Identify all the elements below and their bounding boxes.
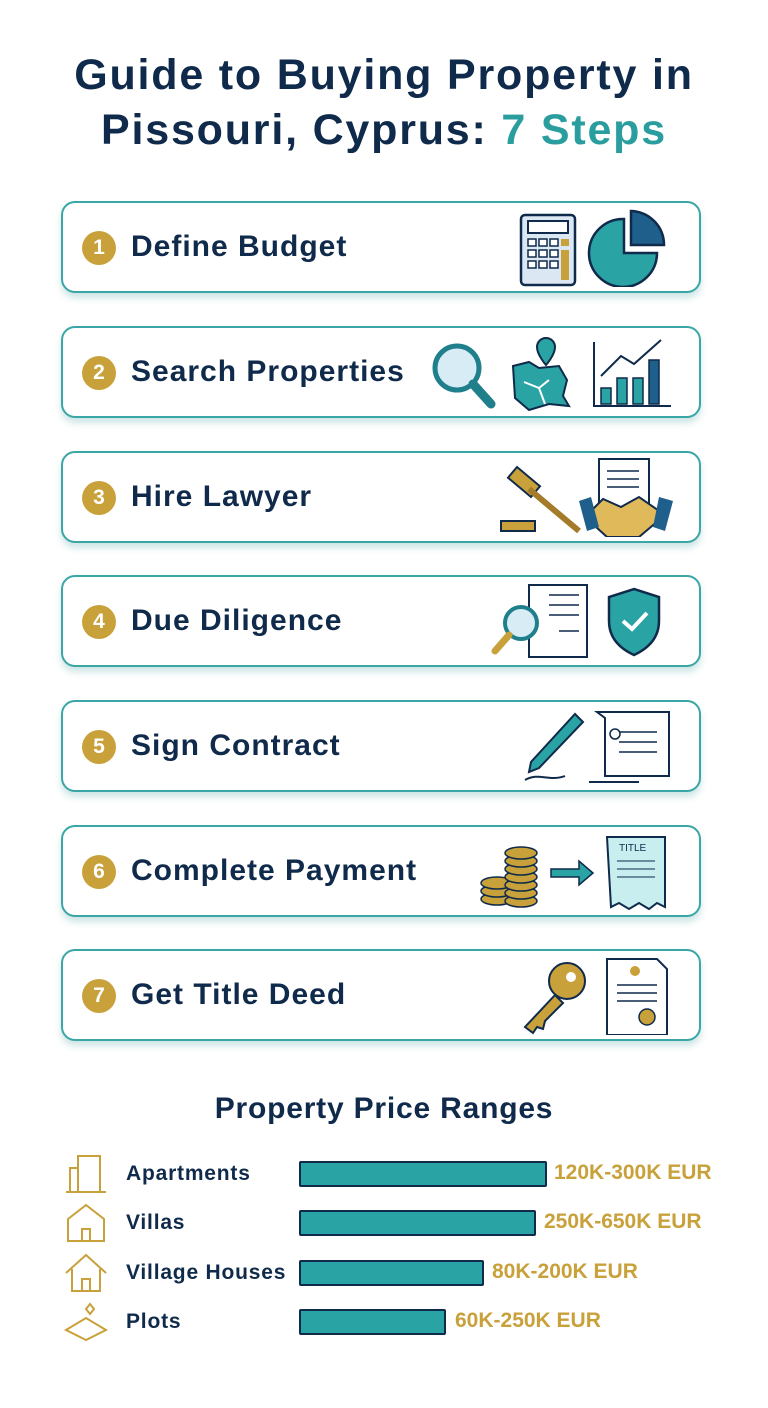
panel: step 6: 6 (93, 860, 105, 883)
icon: document magnifier and shield (492, 584, 660, 658)
row: plots (64, 1302, 601, 1342)
icon: calculator and pie chart (520, 210, 666, 287)
row: apartments: Apartments (126, 1162, 251, 1185)
panel: step 7: Get Title Deed (131, 978, 346, 1011)
icon: key and certificate (524, 958, 668, 1035)
panel: step 7 (61, 949, 701, 1041)
title: Pissouri, Cyprus: 7 Steps (101, 106, 667, 154)
panel: step 4: 4 (93, 610, 105, 633)
icon: coins, arrow, title document: TITLE (619, 843, 647, 854)
row: apartments (66, 1155, 712, 1193)
panel: step 5: 5 (93, 735, 105, 758)
title (74, 51, 694, 154)
panel: step 3 (61, 451, 701, 543)
title: Guide to Buying Property in (74, 51, 694, 99)
panel: step 1: 1 (93, 236, 105, 259)
panel: step 5: Sign Contract (131, 729, 341, 762)
panel: step 4 (61, 575, 701, 667)
panel: step 3: Hire Lawyer (131, 480, 312, 513)
row: plots: Plots (126, 1310, 181, 1333)
panel: step 2: Search Properties (131, 355, 405, 388)
panel: step 7: 7 (93, 984, 105, 1007)
panel: step 1: Define Budget (131, 230, 347, 263)
row: village houses: 80K-200K EUR (492, 1260, 638, 1283)
icon: magnifier, map, chart (432, 337, 671, 412)
row: plots: 60K-250K EUR (455, 1309, 601, 1332)
row: village houses: Village Houses (126, 1261, 286, 1284)
panel: step 2 (61, 326, 701, 418)
icon: coins, arrow, title document (480, 836, 666, 910)
panel: step 6 (61, 825, 701, 917)
icon: gavel and handshake (500, 458, 673, 537)
bar chart (64, 1155, 712, 1342)
row: villas (67, 1204, 702, 1242)
panel: step 2: 2 (93, 361, 105, 384)
panel: step 1 (61, 201, 701, 293)
row: apartments: 120K-300K EUR (554, 1161, 712, 1184)
row: villas: 250K-650K EUR (544, 1210, 702, 1233)
icon: pen and scroll (524, 711, 670, 783)
panel: step 6: Complete Payment (131, 854, 417, 887)
row: village houses (65, 1254, 638, 1292)
row: villas: Villas (126, 1211, 185, 1234)
panel: step 5 (61, 700, 701, 792)
panel: step 4: Due Diligence (131, 604, 342, 637)
panel: step 3: 3 (93, 486, 105, 509)
chart title: Property Price Ranges (215, 1092, 553, 1125)
